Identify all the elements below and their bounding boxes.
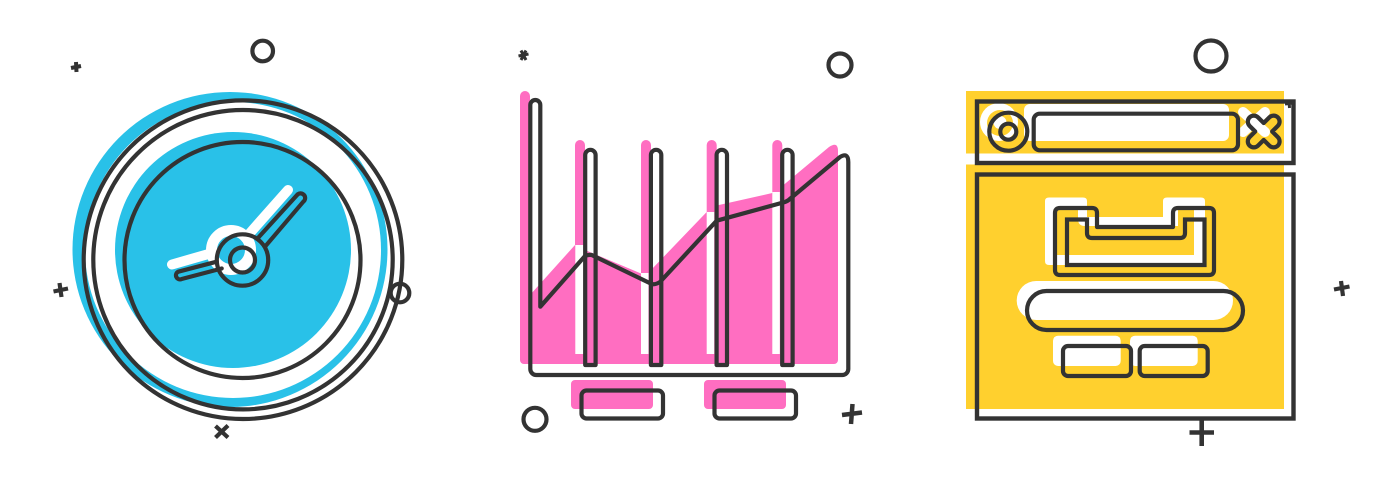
form buttons outline [1063, 346, 1208, 376]
form decoration: circle top [1196, 40, 1226, 72]
clock blue outer disc [72, 92, 388, 407]
clock decoration: asterisk [71, 62, 81, 72]
clock blue face [115, 132, 351, 368]
form decoration: corner asterisk [1285, 100, 1293, 108]
clock white hands offset [172, 190, 288, 270]
clock outer outline rings [84, 100, 402, 419]
clock decoration: circle top [252, 41, 273, 61]
icon: web form window [966, 40, 1350, 446]
chart decoration: circle top right [828, 54, 852, 76]
form window frames [977, 102, 1294, 418]
chart legend outlines [582, 390, 796, 418]
form pill input outline [1027, 291, 1243, 330]
clock decoration: cross [216, 426, 228, 438]
icon: area chart [518, 50, 862, 431]
chart white bar gaps [575, 192, 780, 354]
clock white ring [85, 102, 381, 398]
icon: wall clock [54, 41, 409, 437]
chart bar outlines [585, 150, 793, 365]
form yellow body [966, 164, 1284, 409]
chart decoration: circle bottom left [524, 408, 546, 431]
form title bar controls outline [989, 103, 1292, 160]
form white shapes offset [980, 103, 1265, 366]
clock decoration: circle right [391, 284, 409, 302]
chart axis and trend line outline [530, 100, 848, 375]
clock hands outline [176, 193, 305, 286]
chart pink legend swatches [571, 380, 786, 409]
clock decoration: plus [54, 283, 68, 297]
form decoration: plus bottom [1190, 420, 1214, 446]
chart decoration: asterisk [518, 50, 528, 60]
form tray icon outline [1055, 208, 1214, 275]
form yellow title bar [966, 91, 1284, 154]
chart pink area and bars [520, 91, 838, 364]
form decoration: plus right [1334, 281, 1350, 296]
chart decoration: plus [842, 404, 862, 424]
